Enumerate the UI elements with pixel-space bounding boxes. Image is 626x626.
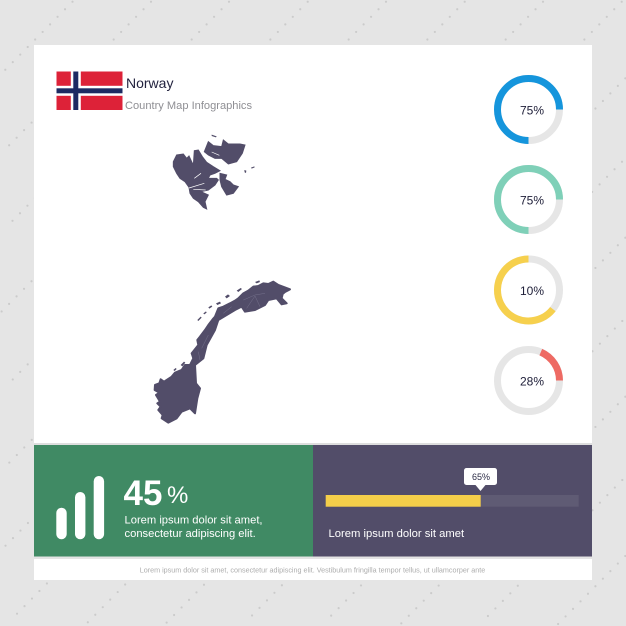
- donut chart: 10% yellow: 10%: [520, 284, 544, 298]
- map: mainland Norway: [155, 280, 290, 423]
- text block: green panel: Lorem ipsum dolor sit amet,: [124, 514, 263, 526]
- text block: green panel: [124, 514, 263, 540]
- icon: Norway flag: [56, 72, 122, 110]
- panel: footer: [34, 556, 592, 580]
- footer text: Lorem ipsum dolor sit amet, consectetur adipiscing elit. Vestibulum fringilla tempor tellus, ut ullamcorper ante: [140, 566, 485, 574]
- donut chart: 28% red: 28%: [520, 374, 544, 388]
- donut chart: 10% yellow: [497, 259, 560, 321]
- icon: bar chart: [56, 476, 104, 539]
- donut chart: 75% blue: [497, 78, 560, 140]
- text block: purple panel: Lorem ipsum dolor sit amet: [328, 528, 465, 540]
- callout: 65%: [464, 468, 497, 491]
- progress bar: [326, 495, 579, 507]
- callout: 65%: 65%: [472, 472, 490, 482]
- donut chart: 75% teal: 75%: [520, 194, 544, 208]
- donut chart: 75% teal: [497, 168, 560, 230]
- donut chart: 28% red: [498, 350, 560, 412]
- panel: green statistic: [34, 445, 313, 556]
- subheading: Country Map Infographics: [125, 100, 252, 112]
- statistic: 45%: %: [167, 482, 188, 509]
- panel: purple progress: [313, 445, 592, 556]
- panel: map card: [34, 45, 592, 443]
- donut chart: 75% blue: 75%: [520, 103, 544, 117]
- heading: Norway: [126, 75, 173, 91]
- statistic: 45%: 45: [124, 474, 162, 513]
- map: Svalbard: [173, 135, 255, 209]
- text block: green panel: consectetur adipiscing elit.: [124, 528, 256, 540]
- statistic: 45%: [124, 474, 188, 513]
